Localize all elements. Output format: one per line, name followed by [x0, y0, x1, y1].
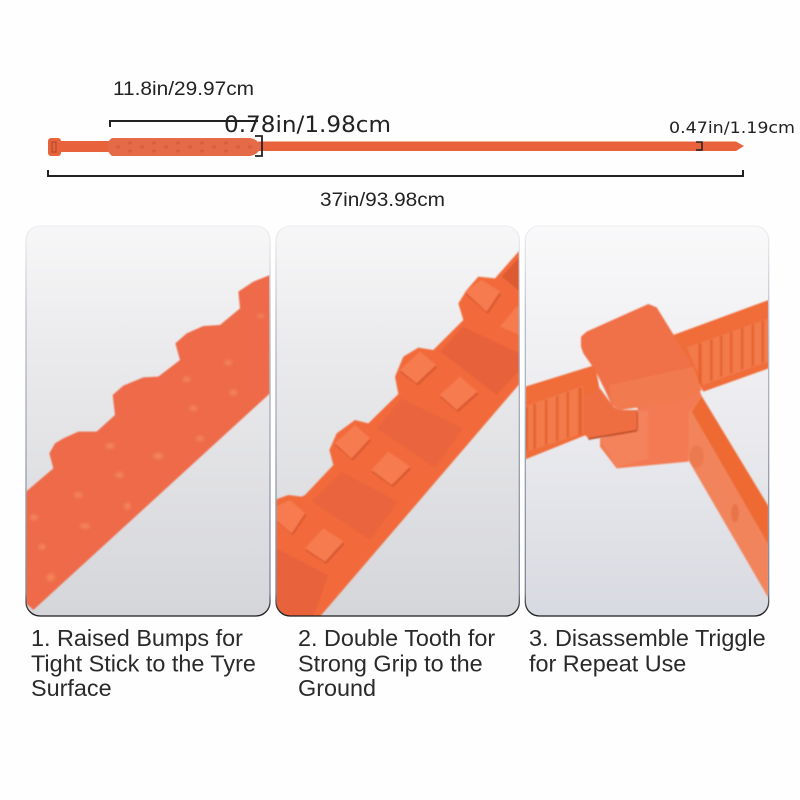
caption 1: 1. Raised Bumps for [31, 625, 243, 651]
panel: raised bumps photo [26, 226, 270, 616]
dimension: strap section length [110, 79, 258, 127]
head top [581, 304, 702, 410]
strap, right [673, 300, 769, 392]
product: full-length strap [48, 138, 744, 156]
caption 1: Tight Stick to the Tyre [31, 650, 256, 676]
caption 2: 2. Double Tooth for [298, 625, 495, 651]
panel: double tooth photo [276, 226, 520, 617]
caption 3: for Repeat Use [529, 650, 686, 676]
dimension: strap width: 0.78in/1.98cm [224, 113, 391, 138]
dimension: strap section length: 11.8in/29.97cm [113, 79, 254, 100]
tail [687, 397, 769, 598]
dimension: tail width: 0.47in/1.19cm [669, 118, 795, 137]
caption 1: Surface [31, 675, 112, 701]
dimension: strap width [224, 113, 391, 156]
dimension: total length [48, 170, 743, 211]
caption 2: Strong Grip to the [298, 650, 483, 676]
dimension: tail width [669, 118, 795, 150]
dimension: total length: 37in/93.98cm [320, 190, 445, 211]
panel: disassemble trigger photo [525, 226, 769, 616]
strap, left [525, 365, 607, 459]
caption 2: Ground [298, 675, 376, 701]
head body [600, 383, 702, 468]
caption 3: 3. Disassemble Triggle [529, 625, 766, 651]
